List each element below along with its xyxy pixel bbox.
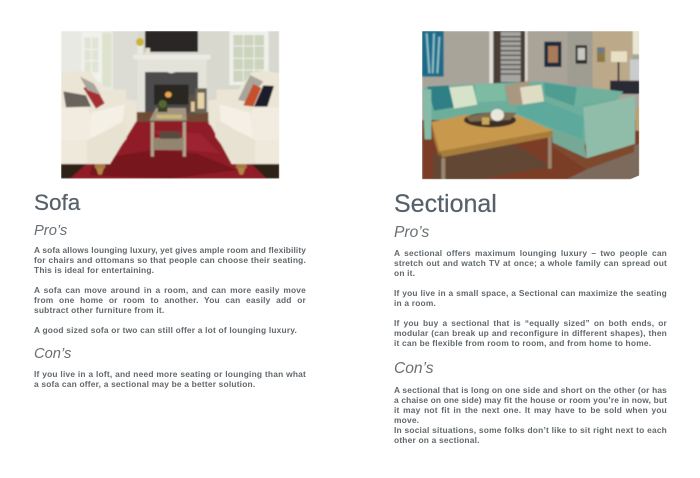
text block: Sectional pros: in a room. (394, 298, 436, 308)
text block: Sectional cons: other on a sectional. (394, 435, 480, 445)
text block: Sofa pros: This is ideal for entertaining. (34, 265, 154, 275)
text block: Sofa pros: from one home or room to another. You can easily add or (34, 295, 306, 305)
text block: Sectional pros: modular (can break up and reconfigure in different shapes), then (394, 328, 667, 338)
text block: Sofa cons (34, 369, 306, 389)
text block: Sectional pros: If you live in a small space, a Sectional can maximize the seating (394, 288, 667, 298)
left sofa (61, 71, 137, 164)
sectional sofa (423, 82, 623, 148)
text block: Sofa pros: A sofa can move around in a room, and can more easily move (34, 285, 306, 295)
subheading: Sectional pros: Pro’s (394, 224, 429, 241)
text block: Sectional pros: on it. (394, 268, 415, 278)
text block: Sectional cons: move. (394, 415, 419, 425)
text block: Sectional cons: A sectional that is long on one side and short on the other (or has (394, 385, 667, 395)
text block: Sofa pros: A good sized sofa or two can still offer a lot of lounging luxury. (34, 325, 297, 335)
subheading: Sofa pros: Pro’s (34, 223, 67, 239)
text block: Sectional cons: a chaise on one side) may fit the house or room you’re in now, but (394, 395, 667, 405)
heading: Sofa: Sofa (34, 190, 80, 215)
text block: Sectional pros (394, 248, 667, 348)
text block: Sectional cons: In social situations, some folks don’t like to sit right next to each (394, 425, 667, 435)
coffee table (149, 108, 187, 121)
text block: Sectional pros: it can be flexible from room to room, and from home to home. (394, 338, 651, 348)
photo: living room with two sofas (61, 31, 280, 179)
text block: Sofa pros (34, 245, 306, 335)
text block: Sectional cons (394, 385, 667, 445)
text block: Sofa pros: for chairs and ottomans so that people can choose their seating. (34, 255, 306, 265)
heading: Sectional: Sectional (394, 190, 497, 218)
text block: Sofa cons: a sofa can offer, a sectional may be a better solution. (34, 379, 255, 389)
subheading: Sectional cons: Con’s (394, 360, 434, 377)
ottoman (431, 115, 553, 151)
text block: Sofa cons: If you live in a loft, and need more seating or lounging than what (34, 369, 306, 379)
tray with teapot (464, 113, 516, 127)
text block: Sectional pros: stretch out and watch TV at once; a whole family can spread out (394, 258, 667, 268)
right sofa (208, 71, 279, 164)
text block: Sectional pros: A sectional offers maximum lounging luxury – two people can (394, 248, 667, 258)
text block: Sofa pros: subtract other furniture from it. (34, 305, 164, 315)
photo: living room with teal sectional (422, 31, 640, 180)
text block: Sectional cons: it may not fit in the next one. It may have to be sold when you (394, 405, 667, 415)
text block: Sectional pros: If you buy a sectional that is “equally sized” on both ends, or (394, 318, 667, 328)
text block: Sofa pros: A sofa allows lounging luxury, yet gives ample room and flexibility (34, 245, 306, 255)
subheading: Sofa cons: Con’s (34, 346, 71, 362)
